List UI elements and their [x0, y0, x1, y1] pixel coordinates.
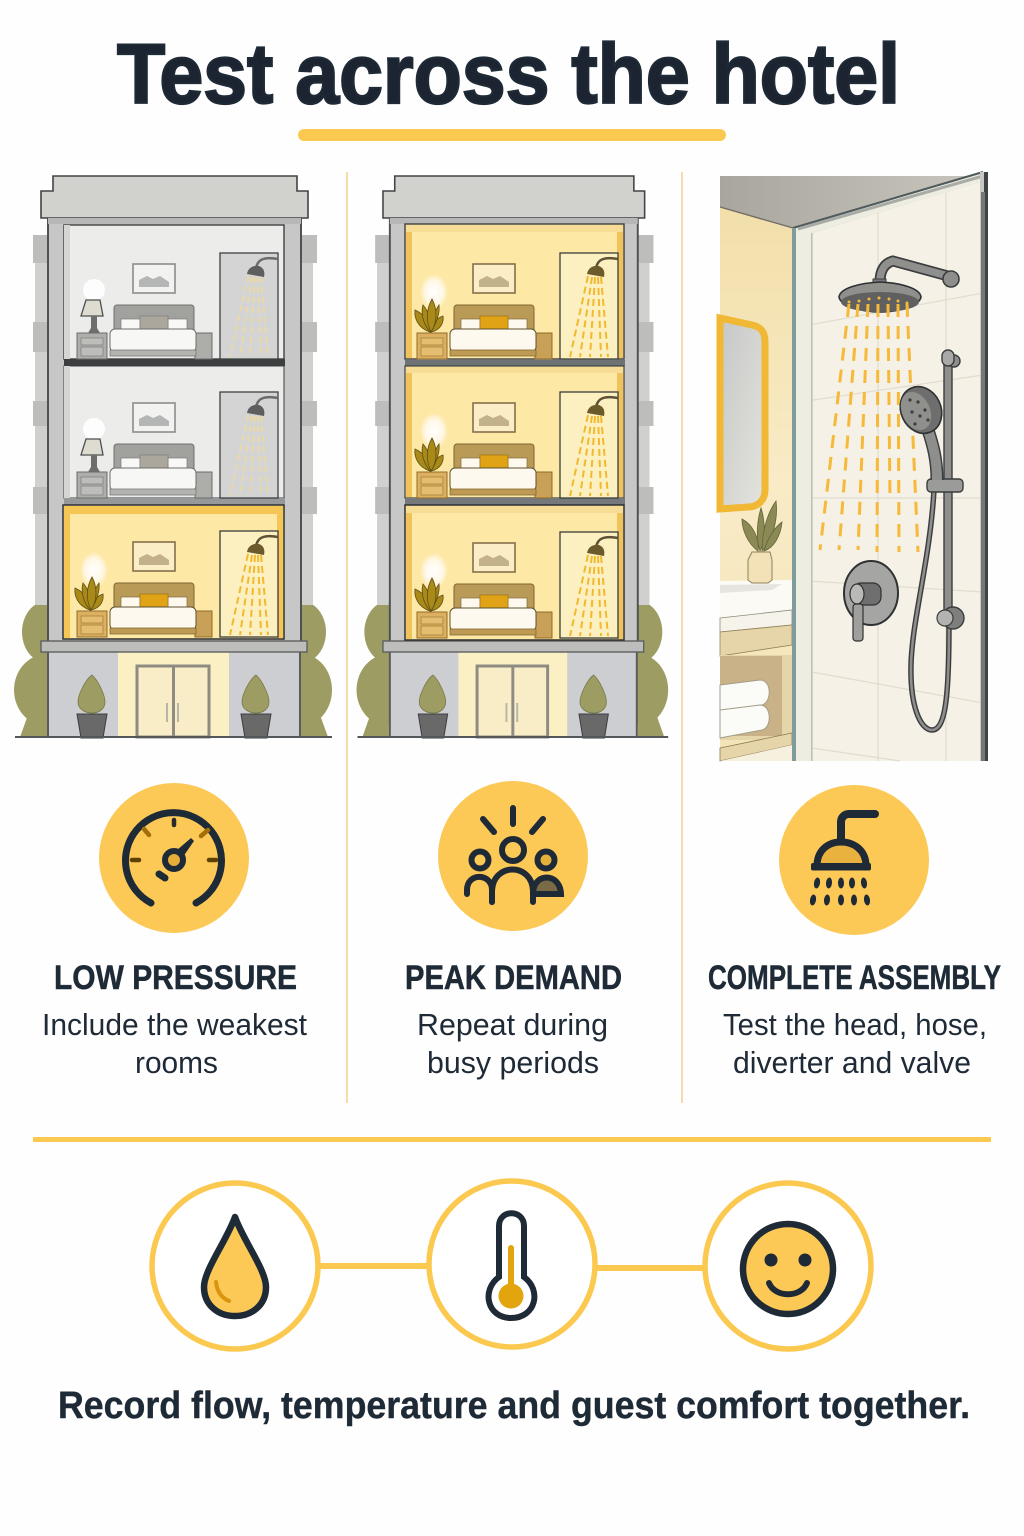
panel text: low pressure: Include the weakest [42, 1007, 307, 1042]
water spray [820, 304, 918, 552]
column dividers [346, 172, 683, 1103]
panel: shower close-up [720, 172, 988, 761]
section rule [33, 1137, 991, 1142]
bathroom wall [720, 207, 793, 761]
panel: peak demand building [357, 176, 668, 738]
panel text: complete assembly: Test the head, hose, [723, 1007, 987, 1042]
icon: thermometer [429, 1181, 595, 1347]
panel text: peak demand: Repeat during [417, 1007, 608, 1042]
glass frame [793, 172, 983, 761]
icon: water drop [152, 1183, 318, 1349]
icon: smiley [705, 1183, 871, 1349]
closing statement: Record flow, temperature and guest comfort together. [58, 1385, 970, 1427]
icon: crowd of guests [438, 781, 588, 931]
room: top floor lit [415, 253, 618, 359]
ceiling [720, 176, 984, 236]
vanity with towels [720, 580, 792, 761]
panel text: low pressure [42, 959, 307, 1080]
right wall edge [980, 172, 988, 761]
tiled shower wall [812, 181, 983, 761]
room: ground floor lit [415, 532, 618, 638]
icon: shower head [779, 785, 929, 935]
room: middle floor lit [415, 392, 618, 498]
mirror [720, 318, 765, 509]
plant in vase [742, 501, 782, 583]
slide rail and hose [911, 350, 964, 730]
panel text: complete assembly [708, 959, 1001, 1080]
mixer valve [844, 561, 898, 641]
room: top floor unlit [77, 253, 278, 359]
title underline [298, 129, 726, 141]
title: Test across the hotel [117, 27, 900, 121]
panel text: peak demand: PEAK DEMAND [405, 959, 622, 997]
hand shower [893, 380, 949, 480]
panel text: peak demand [405, 959, 622, 1080]
panel: low pressure building [14, 176, 332, 738]
room: ground floor lit [75, 531, 278, 637]
panel text: peak demand: busy periods [427, 1045, 599, 1080]
connector lines [320, 1266, 704, 1268]
icon: pressure gauge [99, 783, 249, 933]
room: middle floor unlit [77, 392, 278, 498]
rain shower head [839, 261, 959, 312]
panel text: low pressure: LOW PRESSURE [54, 959, 297, 997]
panel text: complete assembly: diverter and valve [733, 1045, 971, 1080]
panel text: low pressure: rooms [135, 1045, 218, 1080]
